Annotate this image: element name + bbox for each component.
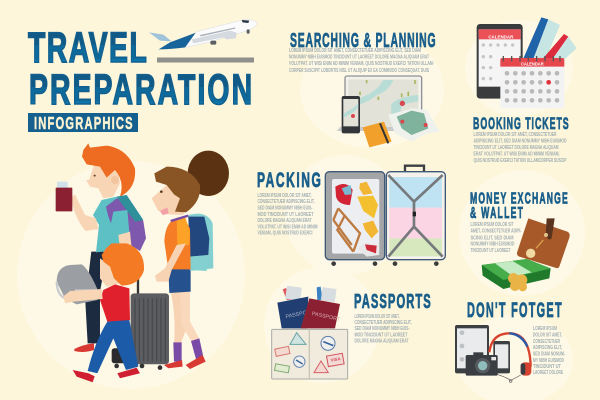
section: don't forget (455, 298, 565, 382)
section: passports (272, 286, 431, 379)
body text: NONUMMY NIBH EUISMOD TINCIDUNT UT LAOREET DOLORE MAGNA ALIQUAM ERAT (289, 54, 429, 60)
body text: LOREM IPSUM DOLOR SIT (470, 222, 514, 228)
heading: passports: PASSPORTS (354, 291, 431, 313)
runway line (157, 58, 254, 62)
body text: DOLOR SIT AMET, (533, 332, 562, 338)
body text: LOREM IPSUM DOLOR SIT AMET, (258, 193, 312, 199)
body text: NONUMMY NIBH EUISMOD (470, 242, 515, 248)
body text: DOLORE MAGNA ALIQUAM ERAT (354, 338, 409, 344)
body text: MOD TINCIDUNT UT LAOREET (354, 332, 408, 338)
section: packing (257, 166, 445, 266)
body text: TINCIDUNT UT LAOREET (470, 248, 511, 254)
body text: SED DIAM NONUMMY NIBH EUIS- (354, 326, 410, 332)
section: money exchange and wallet (470, 189, 570, 291)
body text: ADIPISCING ELIT, (533, 345, 562, 351)
section: booking tickets (473, 17, 577, 164)
heading: don't fotget: DON'T FOTGET (467, 298, 562, 322)
body text: MY NIBH EUISMOD (533, 358, 564, 364)
body text: MOD TINCIDUNT UT LAOREET (258, 212, 314, 218)
body text: LOREM IPSUM DOLOR SIT AMET, (354, 314, 400, 320)
heading: booking tickets: BOOKING TICKETS (473, 114, 569, 133)
body text: VOLUTPAT. UT WISI ENIM AD MINIM (258, 224, 318, 230)
body text: SED DIAM NONUM- (533, 352, 565, 358)
illustration: phone calendar tickets (477, 17, 577, 108)
subtitle badge: INFOGRAPHICS: INFOGRAPHICS (34, 113, 133, 134)
illustration: wallet cash coins (482, 218, 570, 291)
illustration: phone calendar tickets: CALENDAR (488, 34, 514, 39)
body text: CORPER SUSCIPIT LOBORTIS NISL UT ALIQUIP EX EA COMMODO CONSEQUAT. DUIS (289, 68, 429, 74)
suitcase (112, 279, 169, 370)
illustration: passports and stamped pages: PASSPORT (311, 311, 341, 323)
body text (289, 48, 434, 74)
illustration: laptop map phone guide book (337, 76, 440, 147)
body text: TINCIDUNT UT (533, 364, 562, 370)
illustration: passports and stamped pages (272, 286, 348, 379)
body text: CONSECTETUER ADIPISCING ELIT, (258, 199, 315, 205)
title: PREPARATION: PREPARATION (29, 65, 252, 113)
illustration: phone calendar tickets: CALENDAR (521, 61, 544, 66)
heading: packing: PACKING (257, 167, 321, 192)
panel: family travellers (56, 143, 229, 382)
body text: LAOREET DOLORE (533, 370, 563, 376)
body text: CONSECTETUER ADIPISCING ELIT, (354, 320, 412, 326)
body text (354, 314, 412, 344)
title: TRAVEL: TRAVEL (28, 23, 147, 71)
body text: CONSECTETUER (533, 339, 560, 345)
body text (258, 193, 318, 236)
heading: searching and planning: SEARCHING & PLANNING (290, 31, 436, 52)
body text: SCING ELIT, SED DIAM (470, 236, 514, 242)
body text: LOREM IPSUM DOLOR SIT AMET, CONSECTETUER ADIPISCING ELIT, SED DIAM (289, 48, 421, 54)
body text (533, 326, 565, 376)
body text: VENIAM, QUIS NOSTRUD EXERCI (258, 230, 313, 236)
heading: money exchange and wallet: MONEY EXCHANGE (470, 189, 568, 207)
section: searching and planning (289, 31, 440, 147)
woman (152, 151, 229, 369)
illustration: open suitcase (325, 166, 445, 266)
body text: AMET, CONSECTETUER ADIPI- (470, 228, 522, 234)
heading: money exchange and wallet: & WALLET (470, 203, 523, 222)
body text: LOREM IPSUM (533, 326, 557, 332)
icon: airplane (149, 19, 257, 49)
body text: VOLUTPAT. UT WISI ENIM AD MINIM VENIAM, QUIS NOSTRUD EXERCI TATION ULLAM- (289, 61, 434, 67)
body text (474, 132, 567, 164)
illustration: passports and stamped pages: PASSPORT (285, 308, 315, 320)
body text: SED DIAM NONUMMY NIBH EUIS- (258, 206, 313, 212)
body text: DOLORE MAGNA ALIQUAM ERAT (258, 218, 312, 224)
illustration: passports and stamped pages: VISA (330, 356, 342, 363)
man (56, 143, 146, 352)
body text (470, 222, 522, 254)
illustration: tablet phone camera headphones (455, 325, 531, 382)
title block (28, 23, 252, 134)
heading: money exchange and wallet (470, 189, 568, 222)
boy with grey backpack (57, 243, 144, 382)
